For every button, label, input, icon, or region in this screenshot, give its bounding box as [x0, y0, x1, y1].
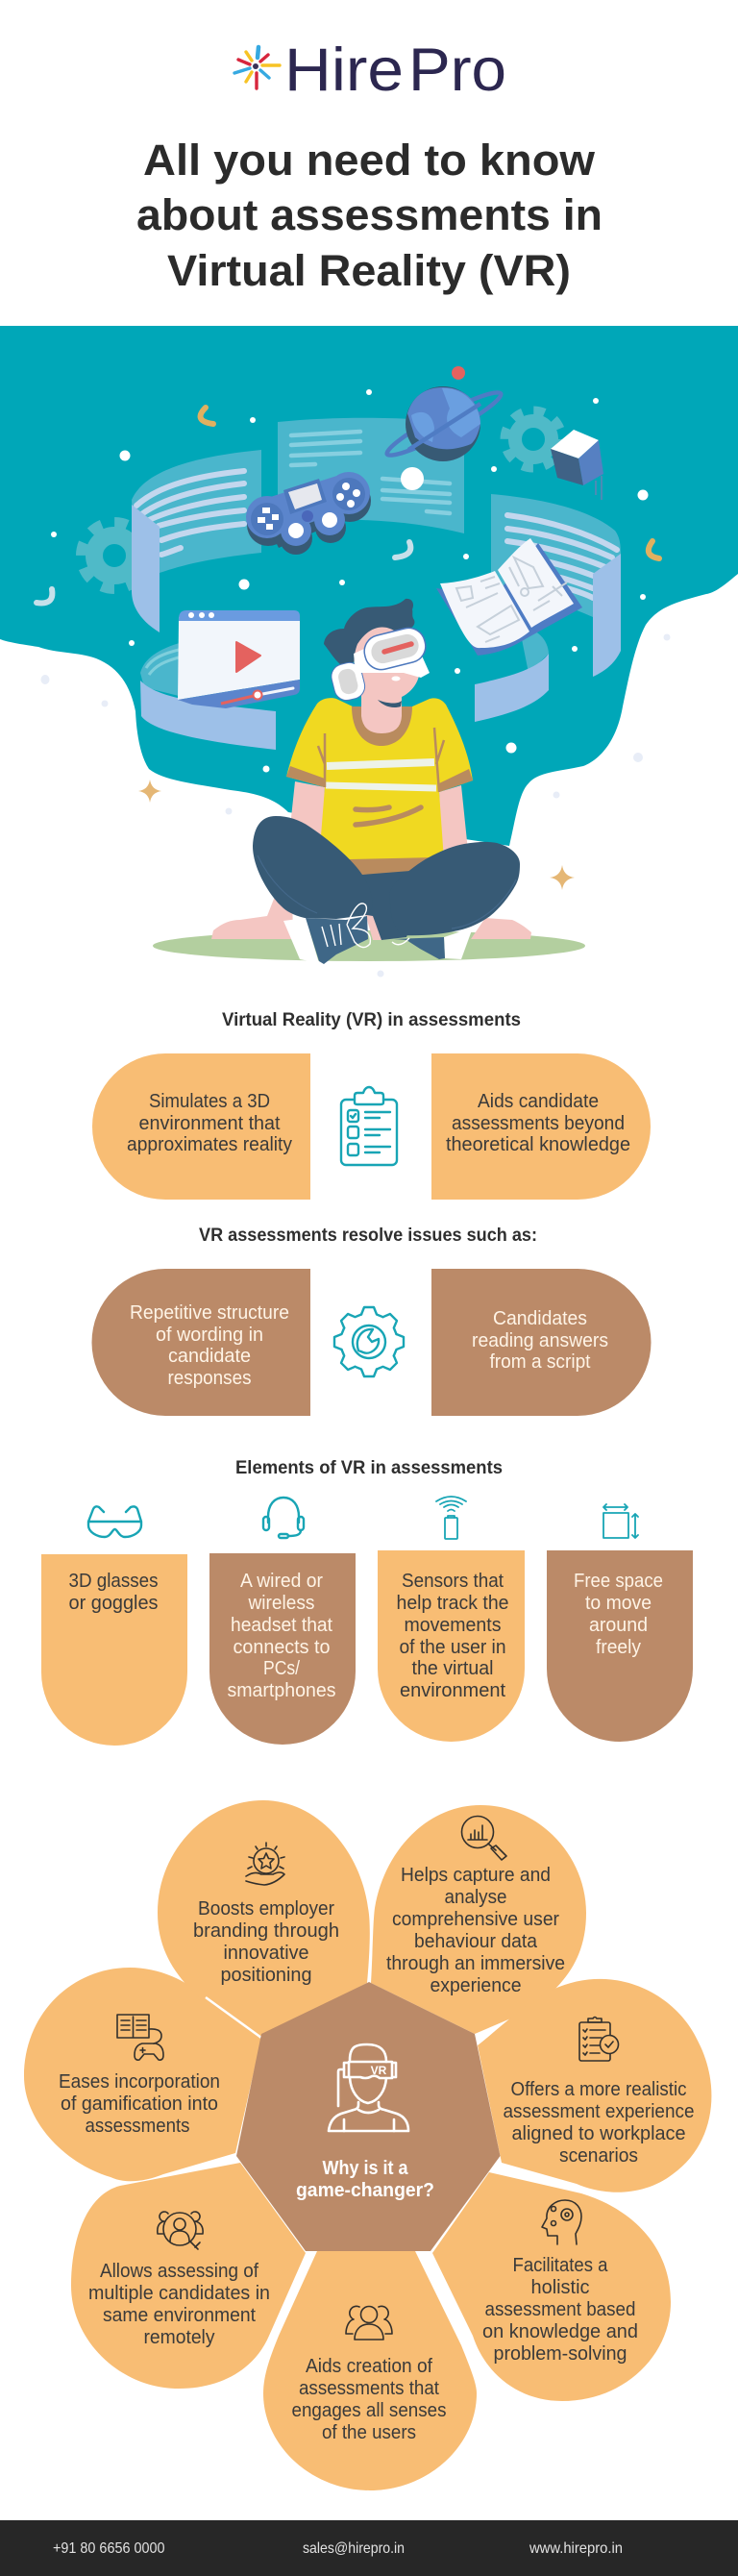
pill: simulates: Simulates a 3D — [149, 1091, 270, 1112]
card: headset: PCs/ — [263, 1658, 300, 1679]
petal: offers realistic experience: assessment experience — [504, 2101, 694, 2122]
illustration: VR hero — [0, 326, 738, 977]
footer bar: www.hirepro.in — [529, 2540, 623, 2557]
petal: facilitates holistic assessment: on knowledge and — [482, 2321, 638, 2342]
footer bar — [0, 2520, 738, 2576]
ground ellipse — [153, 930, 585, 961]
card: headset: A wired or — [240, 1571, 323, 1592]
petal: offers realistic experience: aligned to workplace — [511, 2123, 686, 2144]
title: All you need to know — [143, 136, 596, 185]
title: Virtual Reality (VR) — [167, 246, 571, 295]
petal: offers realistic experience: scenarios — [559, 2145, 638, 2167]
pill: aids candidate: theoretical knowledge — [446, 1134, 630, 1155]
icon: gear with wrench — [334, 1307, 404, 1376]
pill: repetitive structure: Repetitive structure — [130, 1302, 289, 1324]
petal: helps capture and analyse: through an immersive — [386, 1953, 565, 1974]
pill: simulates: approximates reality — [127, 1134, 292, 1155]
person — [211, 599, 531, 964]
petal: helps capture and analyse: experience — [430, 1975, 521, 1996]
pill: simulates: environment that — [138, 1113, 281, 1134]
pill: repetitive structure: candidate — [168, 1346, 251, 1367]
pill: aids candidate — [431, 1053, 651, 1200]
open book — [436, 538, 582, 656]
shoes — [283, 904, 473, 964]
heading: VR assessments resolve issues: VR assessments resolve issues such as: — [199, 1226, 537, 1246]
petal: aids creation: Aids creation of — [306, 2356, 432, 2377]
screen panel right — [491, 494, 621, 677]
icon: headset — [263, 1498, 304, 1538]
pale dots on white — [40, 634, 671, 977]
title: about assessments in — [136, 190, 603, 239]
VR headset — [329, 625, 430, 703]
petal: facilitates holistic assessment — [432, 2172, 671, 2401]
card: headset: connects to — [233, 1637, 331, 1658]
icon: free space — [603, 1504, 638, 1538]
footer bar: +91 80 6656 0000 — [53, 2540, 165, 2557]
card: free space: freely — [596, 1637, 641, 1658]
smile — [392, 677, 400, 681]
pill: aids candidate: assessments beyond — [452, 1113, 625, 1134]
pill: simulates — [92, 1053, 310, 1200]
heading: Virtual Reality in assessments: Virtual Reality (VR) in assessments — [222, 1010, 521, 1030]
card: headset: smartphones — [227, 1680, 336, 1701]
petal: allows assessing: remotely — [144, 2327, 215, 2348]
pill: repetitive structure: of wording in — [156, 1325, 263, 1346]
ribbon lower right — [475, 625, 549, 722]
petal: allows assessing: Allows assessing of — [100, 2261, 258, 2282]
pill: reading answers: Candidates — [493, 1308, 587, 1329]
petal: aids creation: assessments that — [299, 2378, 439, 2399]
title — [136, 136, 603, 295]
petal: aids creation: of the users — [322, 2422, 416, 2443]
pill: repetitive structure: responses — [167, 1368, 252, 1389]
card: sensors — [378, 1550, 525, 1742]
icon: sensor — [436, 1497, 466, 1539]
petal: helps capture and analyse: comprehensive user — [392, 1909, 559, 1930]
card: free space: around — [589, 1615, 648, 1636]
icon: 3D glasses — [88, 1506, 141, 1537]
card: free space: to move — [585, 1593, 652, 1614]
panel: VR in assessments — [92, 1053, 651, 1200]
petal: aids creation: engages all senses — [292, 2400, 446, 2421]
card: sensors: help track the — [396, 1593, 509, 1614]
planet — [382, 385, 505, 462]
card: 3D glasses: 3D glasses — [69, 1571, 158, 1592]
petal: eases incorporation — [24, 1968, 261, 2181]
sparkles — [138, 780, 575, 890]
petal: facilitates holistic assessment: Facilitates a — [513, 2255, 608, 2276]
petal: allows assessing: same environment — [103, 2305, 256, 2326]
pill: aids candidate: Aids candidate — [478, 1091, 599, 1112]
footer bar: sales@hirepro.in — [303, 2540, 405, 2557]
logo: HirePro: Pro — [408, 37, 506, 104]
icon: gear left — [83, 524, 146, 587]
petal: boosts employer branding: branding through — [193, 1920, 339, 1942]
card: headset: headset that — [231, 1615, 332, 1636]
card: sensors: of the user in — [400, 1637, 505, 1658]
pill: repetitive structure — [92, 1269, 310, 1416]
teal background blob — [0, 326, 738, 846]
flower: why is it a game-changer — [24, 1800, 711, 2490]
game controller — [246, 472, 371, 555]
panel: elements — [41, 1497, 693, 1746]
petal: boosts employer branding: positioning — [221, 1965, 311, 1986]
petal: boosts employer branding — [158, 1800, 370, 2038]
legs — [253, 816, 520, 940]
centre heptagon — [236, 1982, 500, 2251]
petal: helps capture and analyse: behaviour data — [414, 1931, 538, 1952]
icon: logo star — [234, 47, 280, 88]
petal: eases incorporation: of gamification into — [61, 2093, 218, 2115]
petal: eases incorporation: Eases incorporation — [59, 2071, 220, 2093]
petal: facilitates holistic assessment: assessment based — [484, 2299, 636, 2320]
petal: eases incorporation: assessments — [85, 2116, 190, 2137]
petal: boosts employer branding: Boosts employer — [198, 1898, 334, 1920]
screen panel left — [132, 450, 261, 632]
petal: offers realistic experience — [478, 1979, 711, 2192]
card: 3D glasses — [41, 1554, 187, 1746]
petal: offers realistic experience: Offers a more realistic — [511, 2079, 686, 2100]
logo: HirePro: Hire — [284, 37, 404, 104]
petal: facilitates holistic assessment: holistic — [530, 2277, 590, 2298]
red dot — [452, 366, 465, 380]
logo: HirePro — [234, 37, 506, 104]
card: sensors: Sensors that — [402, 1571, 504, 1592]
petal: facilitates holistic assessment: problem-solving — [494, 2343, 627, 2365]
petal: allows assessing — [71, 2163, 306, 2389]
petal: helps capture and analyse: analyse — [444, 1887, 507, 1908]
leg creases — [258, 855, 516, 929]
icon: person with VR headset — [329, 2044, 408, 2131]
card: headset: wireless — [248, 1593, 315, 1614]
pill: reading answers: reading answers — [472, 1330, 608, 1351]
panel: issues resolved — [92, 1269, 652, 1416]
petal: helps capture and analyse — [371, 1805, 586, 2034]
pill: reading answers: from a script — [490, 1351, 591, 1373]
petal: allows assessing: multiple candidates in — [88, 2283, 270, 2304]
card: sensors: environment — [400, 1680, 505, 1701]
screen panel centre — [278, 418, 464, 533]
cube — [551, 430, 603, 500]
card: sensors: the virtual — [411, 1658, 494, 1679]
heading: Elements of VR: Elements of VR in assessments — [235, 1458, 503, 1478]
feet and arms — [211, 781, 531, 940]
neck — [361, 673, 402, 733]
icon: gear right — [506, 412, 560, 466]
chin shadow — [378, 700, 402, 707]
petal: boosts employer branding: innovative — [223, 1943, 309, 1964]
crescents — [37, 408, 659, 603]
centre heptagon: VR — [371, 2064, 387, 2077]
card: free space: Free space — [574, 1571, 663, 1592]
card: headset — [209, 1553, 356, 1745]
video player window — [178, 610, 300, 708]
petal: aids creation — [263, 2251, 477, 2490]
white dots — [51, 389, 648, 773]
card: free space — [547, 1550, 693, 1742]
card: sensors: movements — [404, 1615, 502, 1636]
card: 3D glasses: or goggles — [69, 1593, 158, 1614]
pill: reading answers — [431, 1269, 652, 1416]
t-shirt — [286, 698, 473, 879]
centre heptagon: Why is it a — [323, 2158, 408, 2179]
icon: clipboard checklist — [341, 1087, 397, 1165]
petal: helps capture and analyse: Helps capture and — [401, 1865, 551, 1886]
hair — [324, 599, 414, 668]
face — [355, 628, 420, 701]
centre heptagon: game-changer? — [296, 2180, 434, 2201]
ribbon lower left — [140, 642, 276, 750]
